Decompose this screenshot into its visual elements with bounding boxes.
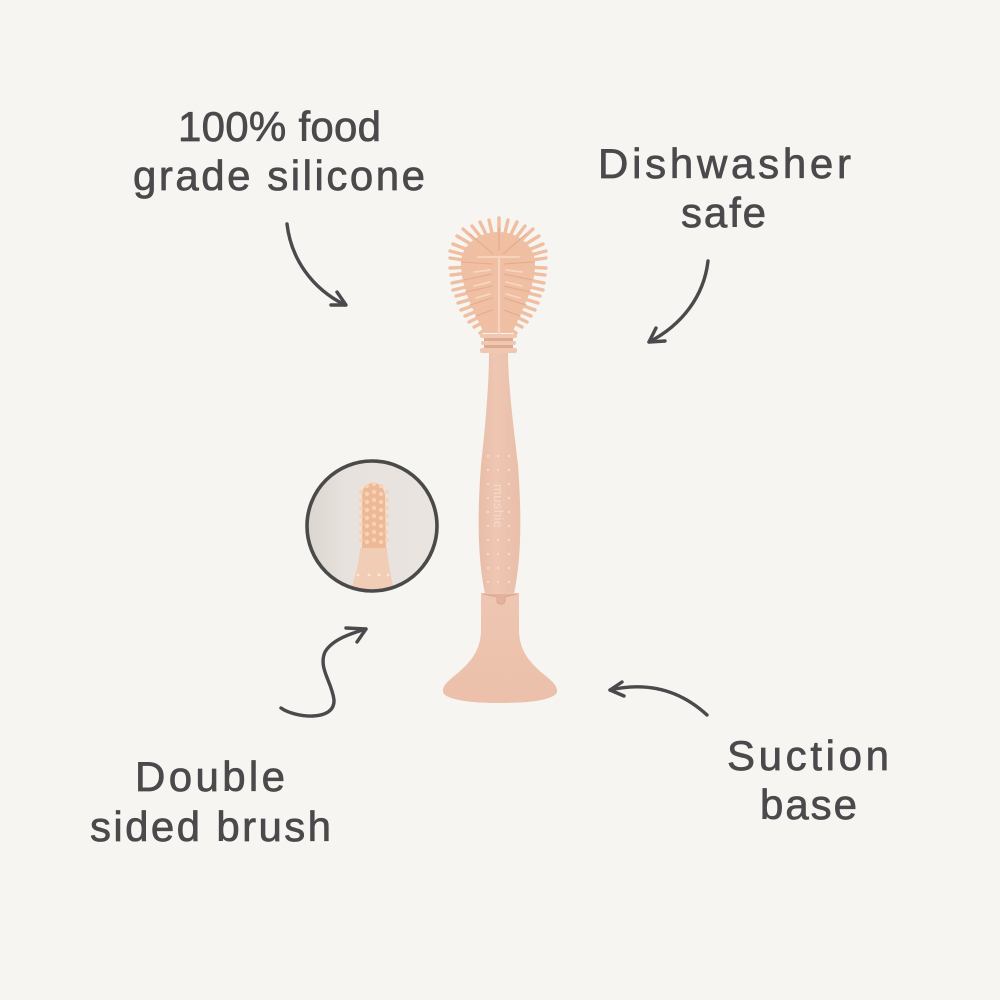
base notch [483,594,517,604]
arrow: suction base pointer [610,682,707,715]
handle [479,353,520,594]
brush head bristles [450,218,546,334]
text: Dishwasher safe: safe [681,189,766,236]
neck rings [480,334,517,353]
suction base [443,593,557,703]
tiny brush tip [351,483,394,592]
text: Double sided brush [90,753,331,850]
text: Dishwasher safe [598,140,851,236]
arrow: silicone to brush head [287,224,346,305]
arrow: dishwasher safe to brush [649,261,708,342]
text: 100% food grade silicone: grade silicone [133,152,425,199]
text: Suction base: base [760,781,857,828]
arrow: squiggle to detail circle [281,628,366,716]
handle dots [488,456,509,590]
text: Double sided brush: sided brush [90,803,331,850]
text: 100% food grade silicone [133,103,425,199]
product: bottle brush [443,218,557,703]
handle logo: mushie [491,484,506,528]
text: Double sided brush: Double [135,753,285,800]
text: Suction base [727,732,889,828]
text: Suction base: Suction [727,732,889,779]
text: 100% food grade silicone: 100% food [178,103,381,150]
detail circle: double sided brush [307,461,437,592]
text: Dishwasher safe: Dishwasher [598,140,851,187]
